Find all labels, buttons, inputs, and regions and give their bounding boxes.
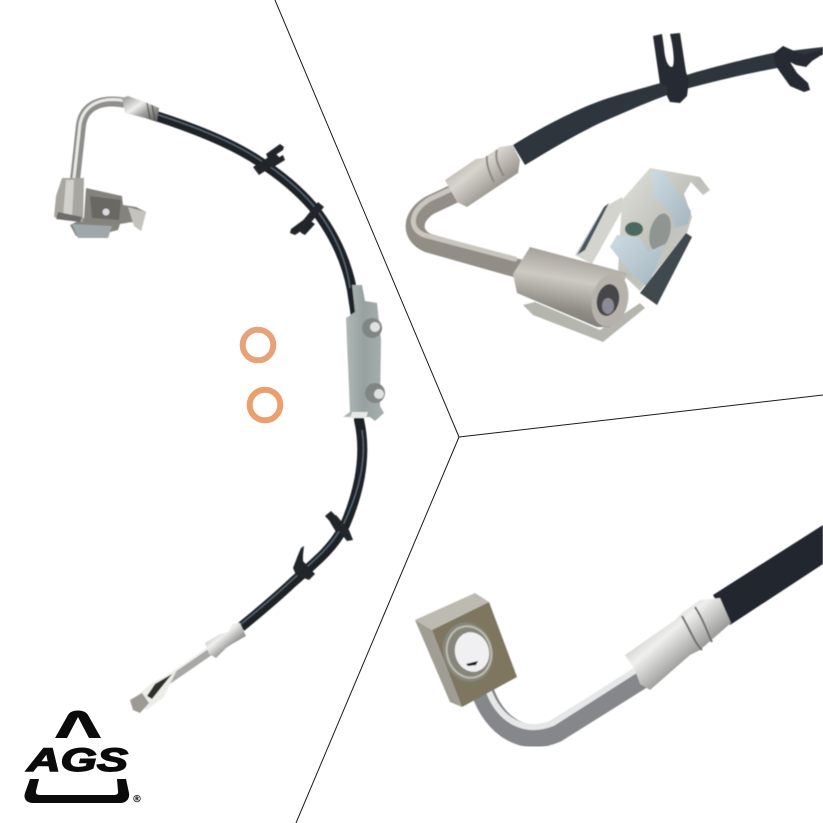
panel: upper fitting close-up: [413, 33, 823, 342]
threaded barrel: [513, 247, 633, 330]
registered mark: ®: [132, 794, 142, 805]
metal tube: [482, 670, 642, 736]
bracket: [523, 168, 710, 342]
hose clip 3: [325, 511, 353, 541]
hose clip 2: [290, 202, 324, 235]
logo chevron: [55, 710, 101, 738]
hose: [513, 47, 823, 165]
logo: AGS: [24, 710, 142, 805]
bolt lower: [365, 383, 385, 403]
top caliper bracket: [54, 178, 146, 238]
copper washer upper: [243, 330, 273, 360]
hose line: [156, 114, 363, 627]
mounting bracket: [343, 285, 384, 421]
crimp collar: [625, 598, 731, 690]
logo base: [24, 779, 129, 803]
clip y-branch: [773, 46, 823, 92]
panel: lower fitting close-up: [415, 525, 823, 736]
clip fork: [653, 33, 689, 103]
panel: full brake hose assembly: [54, 96, 385, 713]
square block front: [432, 602, 517, 707]
logo wordmark: AGS: [26, 742, 129, 778]
bolt upper: [362, 318, 382, 338]
crimp collar: [445, 145, 520, 207]
square block top and side: [415, 593, 489, 707]
threaded hole: [436, 617, 500, 687]
top metal tube and fitting: [74, 96, 159, 180]
hose clip 4: [293, 546, 315, 580]
metal tube: [413, 187, 520, 269]
hose clip 1: [253, 144, 285, 175]
panel dividers: [275, 0, 823, 823]
copper washer lower: [250, 390, 280, 420]
lower metal fitting and tube: [130, 623, 246, 713]
hose: [713, 525, 823, 625]
